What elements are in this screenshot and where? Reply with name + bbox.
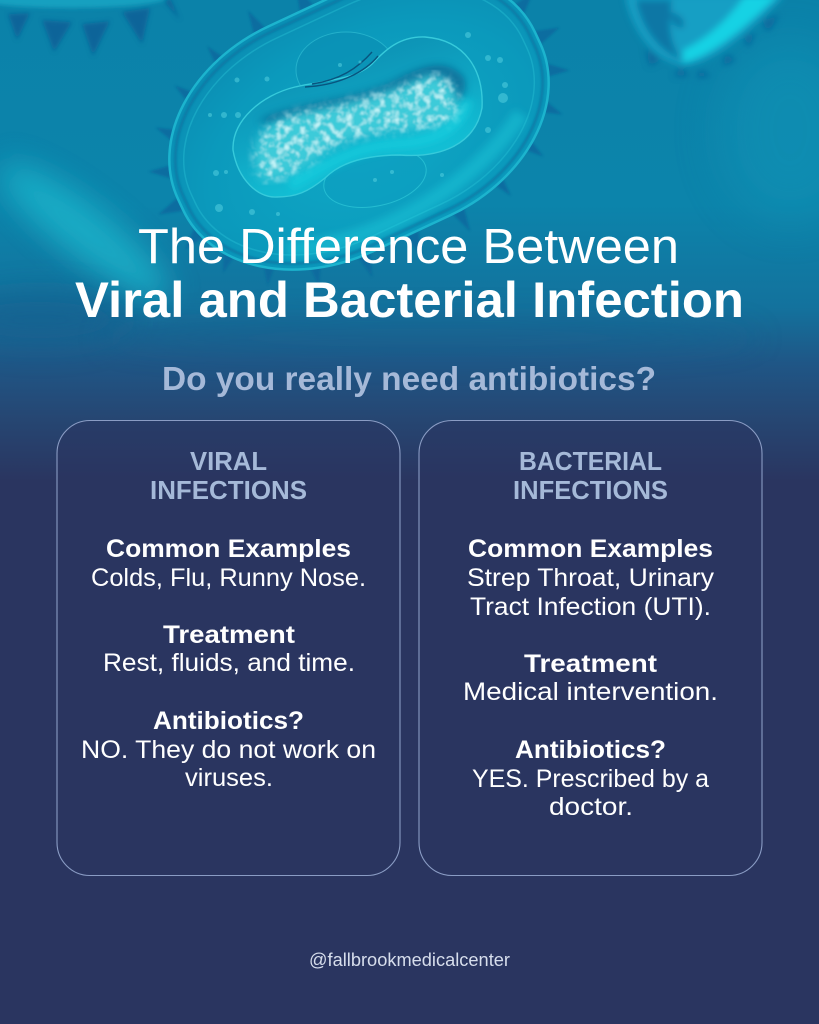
viral heading: [150, 446, 307, 505]
nucleus dark folds: [258, 65, 465, 123]
bacterial antibiotics: [472, 736, 709, 821]
bacterial common examples: Strep Throat, Urinary: [467, 564, 715, 592]
spikes: [150, 0, 568, 282]
subtitle: Do you really need antibiotics?: [162, 360, 656, 397]
microbe top left, out of focus: [0, 0, 180, 56]
bacterial treatment: Medical intervention.: [463, 678, 718, 706]
bacterial common examples: Common Examples: [468, 535, 713, 563]
lower rim highlight: [285, 111, 526, 258]
blurred dark zone lower left: [0, 292, 112, 323]
viral common examples: [91, 535, 366, 592]
nucleus bright band: [290, 100, 468, 185]
bacterial treatment: [463, 650, 718, 706]
viral treatment: Treatment: [163, 621, 296, 649]
cell membrane: [168, 0, 550, 271]
viral common examples: Common Examples: [106, 535, 351, 563]
viral treatment: Rest, fluids, and time.: [103, 649, 355, 677]
microbe top right, out of focus: [625, 0, 785, 78]
panel: viral infections: [57, 420, 400, 876]
viral heading: INFECTIONS: [150, 475, 307, 505]
upper organelle: [296, 32, 388, 86]
membrane folds: [305, 52, 378, 87]
bacterial heading: INFECTIONS: [513, 475, 668, 505]
viral common examples: Colds, Flu, Runny Nose.: [91, 564, 366, 592]
bacterial heading: [513, 446, 668, 505]
bacterial common examples: Tract Infection (UTI).: [470, 593, 711, 621]
nucleus granular mass: [255, 75, 459, 180]
viral antibiotics: NO. They do not work on: [81, 736, 376, 764]
panel outline: [57, 420, 400, 876]
light glow right: [751, 74, 819, 186]
title: [75, 220, 744, 328]
title: The Difference Between: [138, 220, 679, 274]
bacterial heading: BACTERIAL: [519, 446, 662, 476]
background illustration: blurred light streaks and microbes: [0, 0, 819, 358]
viral antibiotics: [81, 707, 376, 792]
light streak lower left: [0, 157, 176, 310]
panel: bacterial infections: [419, 420, 762, 876]
bacterial antibiotics: YES. Prescribed by a: [472, 765, 709, 793]
panel outline: [419, 420, 762, 876]
lower organelle: [323, 156, 427, 208]
viral antibiotics: viruses.: [185, 764, 273, 792]
nucleus: [233, 37, 482, 197]
bacterial treatment: Treatment: [524, 650, 658, 678]
cell vesicles: [208, 32, 508, 216]
bacterial antibiotics: doctor.: [549, 793, 633, 821]
viral treatment: [103, 621, 355, 677]
blurred dark band: [100, 318, 760, 358]
viral heading: VIRAL: [190, 446, 267, 476]
cell body: [170, 0, 548, 268]
viral antibiotics: Antibiotics?: [153, 707, 304, 735]
title: Viral and Bacterial Infection: [75, 272, 744, 328]
footer handle: @fallbrookmedicalcenter: [309, 950, 510, 970]
main virus cell: [150, 0, 568, 282]
bacterial antibiotics: Antibiotics?: [515, 736, 666, 764]
bacterial common examples: [467, 535, 715, 621]
